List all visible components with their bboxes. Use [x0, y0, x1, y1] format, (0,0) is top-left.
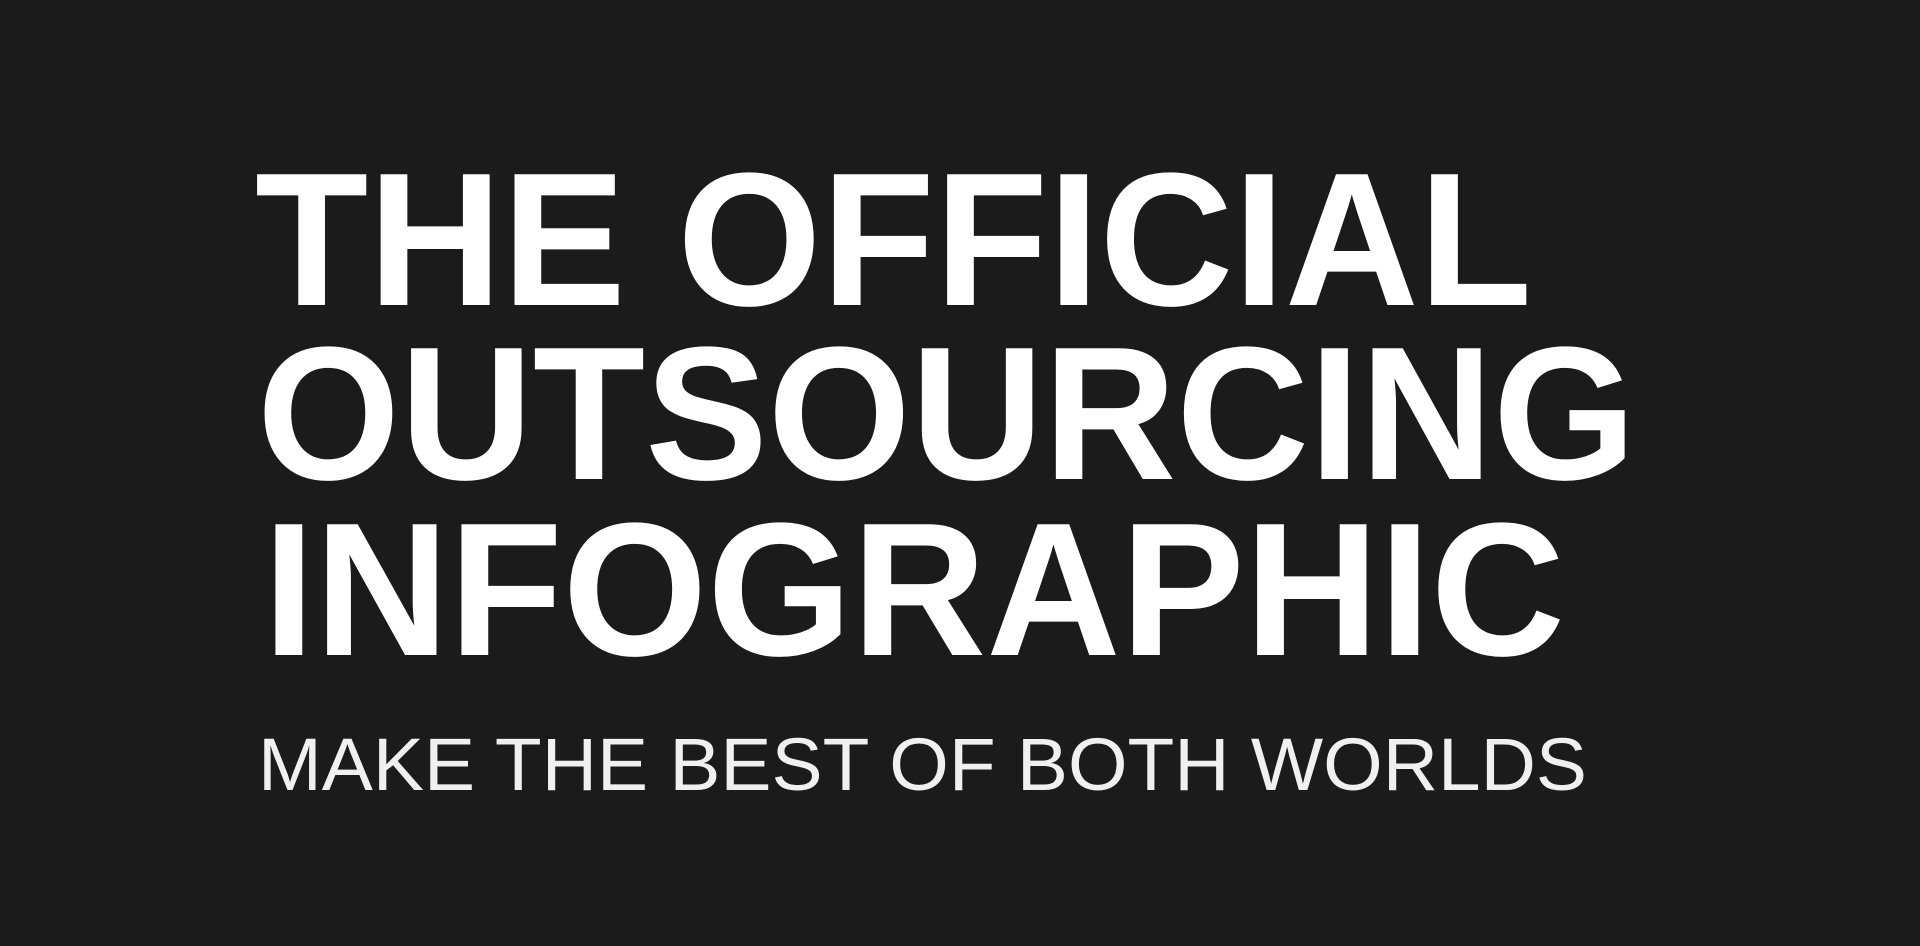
- title line 2: OUTSOURCING: [257, 308, 1636, 520]
- title: [255, 134, 1636, 696]
- subtitle: MAKE THE BEST OF BOTH WORLDS: [258, 723, 1587, 806]
- title line 3: INFOGRAPHIC: [263, 484, 1565, 696]
- title line 1: THE OFFICIAL: [255, 134, 1532, 346]
